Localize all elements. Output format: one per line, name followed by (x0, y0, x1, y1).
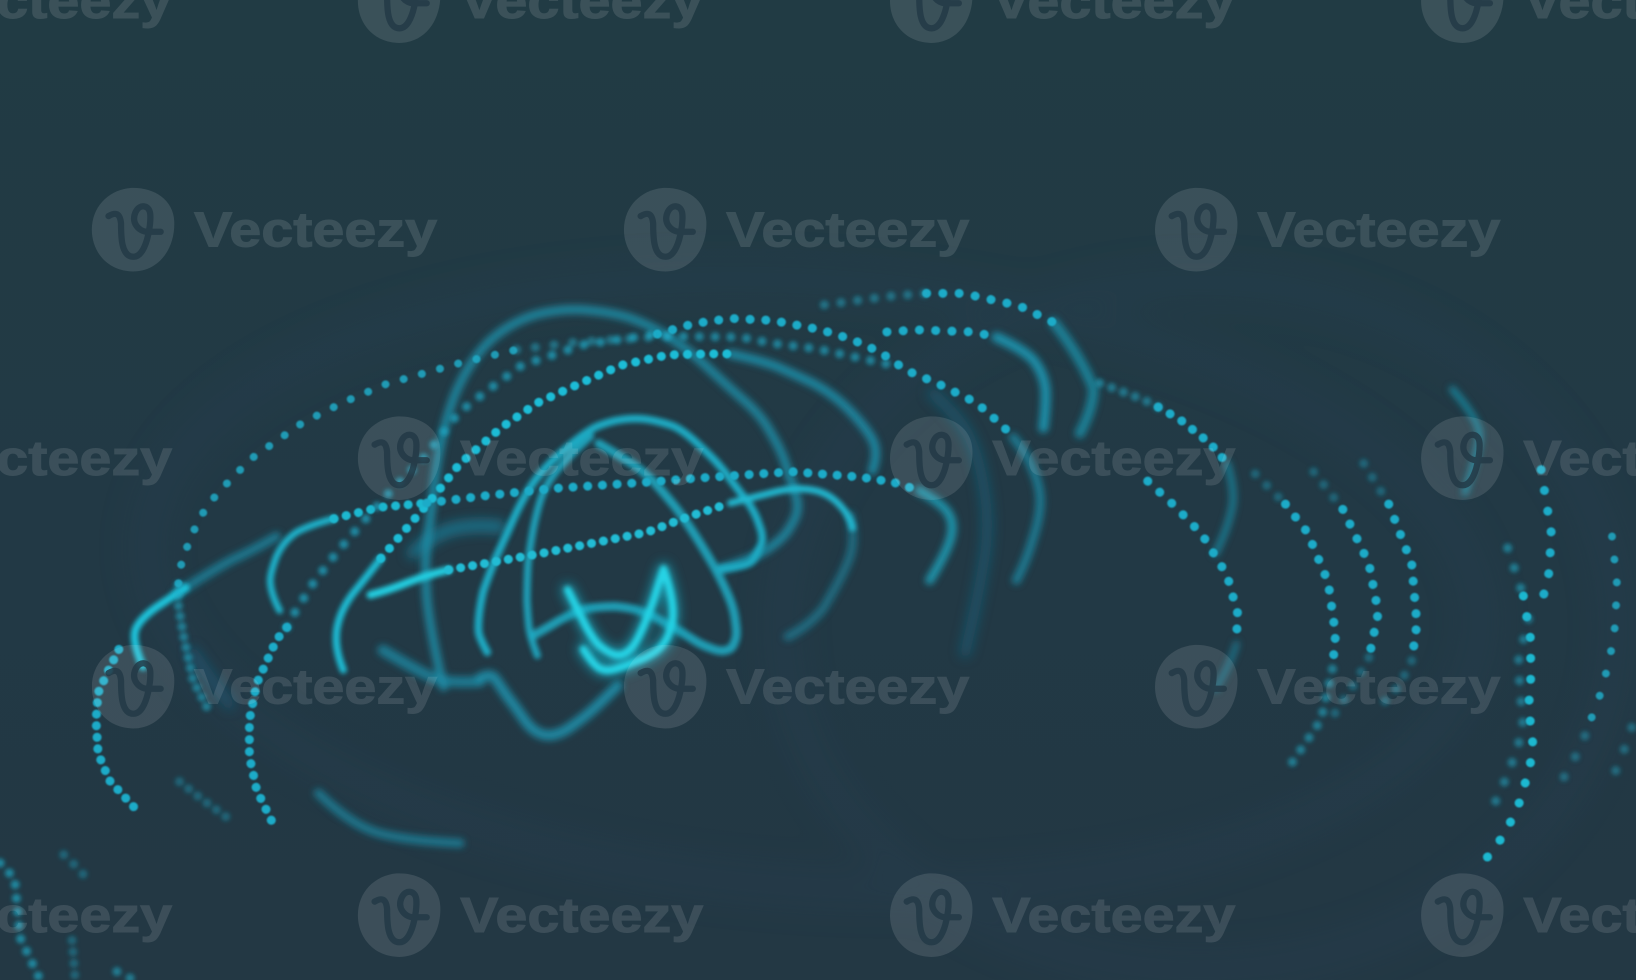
strand: bottom left wisp (318, 793, 460, 843)
strand: right arc of upper loop (730, 354, 876, 471)
dotted line: left lower fade (179, 782, 226, 817)
strand: lower right fade (788, 516, 853, 637)
strand: inner tall loop (527, 436, 591, 655)
dotted line: second top arc (887, 330, 996, 337)
strand: left curl of brightest dotted line (336, 558, 381, 670)
dotted line: top right arc fade (824, 293, 927, 305)
dotted line: upper arc (657, 318, 1013, 437)
watermark row 4 (92, 645, 1500, 728)
blurred inner strands (176, 309, 1480, 843)
strand: upper right hook (996, 337, 1046, 428)
strand: lower left wisp to centre (383, 650, 480, 682)
watermark row 2 (92, 188, 1500, 271)
watermark (1421, 416, 1636, 500)
watermark (890, 0, 1235, 43)
watermark: Vecteezy (194, 203, 437, 257)
dotted line: edge right column (1585, 536, 1617, 736)
dotted line: lower left descent (249, 627, 287, 820)
watermark: Vecteezy (992, 889, 1235, 943)
dotted line: upper right column (1541, 470, 1551, 600)
dotted line: second arc fade (668, 336, 893, 365)
strand: faint left loop (413, 526, 501, 553)
dotted line: brightest arc (381, 354, 730, 558)
dotted line: arc 5 lower fade (1377, 661, 1412, 710)
dotted line: bottom left edge (0, 863, 39, 977)
dotted line: crossing column lower (1490, 619, 1529, 814)
watermark row 3 (0, 416, 1636, 500)
strand: right arc tail (1216, 463, 1233, 553)
dotted line: mid arc fade (287, 334, 657, 627)
dotted line: inner crossing column (1508, 548, 1523, 596)
dotted line: arc 4 lower fade (1330, 657, 1369, 720)
strand: bottom loop (480, 675, 618, 735)
dotted line: bottom left third (72, 940, 75, 980)
dotted line: bottom left second (64, 855, 90, 884)
strand: far right wisp (1452, 389, 1480, 493)
out-of-focus strands (193, 393, 987, 704)
strand: top right hook (1054, 323, 1093, 433)
dotted line: right arc 3 (1285, 504, 1336, 669)
dotted line: left arc lower fade (178, 583, 207, 706)
strand: front line start (370, 570, 449, 595)
dotted line: corner right column (1612, 727, 1632, 780)
W core (568, 569, 673, 670)
strand: middle line tail loop (730, 489, 852, 528)
dotted line: far right main column (1481, 596, 1533, 866)
strand: outer teardrop loop (478, 419, 762, 652)
strand: far inner curve (933, 393, 987, 652)
watermark (624, 645, 969, 728)
strand: tip of middle line (919, 491, 952, 580)
watermark: Vecteezy (726, 660, 969, 714)
faint background swirl (127, 236, 1617, 970)
dotted strands, in focus (96, 293, 1617, 866)
watermark: Vecteezy (1257, 660, 1500, 714)
watermark (92, 645, 437, 728)
watermark: Vecteezy (460, 889, 703, 943)
dotted line: right arc 2 (1148, 481, 1237, 644)
dotted line: arc 4 top fade (1314, 472, 1343, 509)
dotted line: top right arc (927, 293, 1054, 323)
dotted line: far left hook (96, 647, 134, 807)
strand: right side fade of arc (1013, 437, 1040, 580)
watermark (1155, 645, 1500, 728)
watermark (1421, 0, 1636, 43)
dotted line: right arc 4 (1343, 509, 1378, 657)
strand: lower left cross (193, 652, 230, 704)
strand: left curl of upper dotted line (270, 519, 334, 611)
watermark (1155, 188, 1500, 271)
watermark (358, 416, 703, 500)
strand: large top arc and left descent (426, 309, 798, 687)
sharper central strands (135, 419, 852, 670)
watermark: Vecteezy (460, 432, 703, 486)
dotted line: arc 5 top fade (1364, 463, 1389, 504)
watermark (1421, 873, 1636, 957)
dotted line: right arc 1 (1158, 407, 1227, 463)
bright W-shaped glow (568, 569, 673, 670)
strand: right arc 2 tail (1216, 644, 1236, 689)
watermark: Vecteezy (1257, 203, 1500, 257)
watermark: Vecteezy (194, 660, 437, 714)
watermark (890, 873, 1235, 957)
dotted line: left of middle horizontal (334, 503, 427, 519)
watermark (92, 188, 437, 271)
watermark: Vecteezy (992, 432, 1235, 486)
strand: band through centre (533, 444, 736, 651)
dotted line: bottom corner (117, 972, 134, 980)
dotted line: left great arc (178, 350, 516, 583)
watermark (358, 873, 703, 957)
dotted line: arc 3 top fade (1255, 474, 1285, 504)
dotted line: right arc 1 head (1100, 383, 1158, 407)
dotted line: arc 3 lower fade (1285, 669, 1332, 772)
dotted line: front line (449, 503, 730, 570)
watermark (624, 188, 969, 271)
dotted line: right arc 5 (1389, 504, 1417, 661)
W glow halo (568, 569, 673, 670)
dotted line: edge column lower (1555, 736, 1585, 793)
strand: bright far left hook (135, 588, 186, 667)
dotted strands, out of focus (0, 293, 1632, 980)
watermark (890, 416, 1235, 500)
watermark row 5 (0, 873, 1636, 957)
watermark (358, 0, 703, 43)
watermark row 1 (0, 0, 1636, 43)
dotted line: middle horizontal (427, 472, 919, 503)
watermark: Vecteezy (726, 203, 969, 257)
dotted line: left great arc fade top (516, 336, 668, 350)
strand: left wisp fading (176, 536, 276, 594)
